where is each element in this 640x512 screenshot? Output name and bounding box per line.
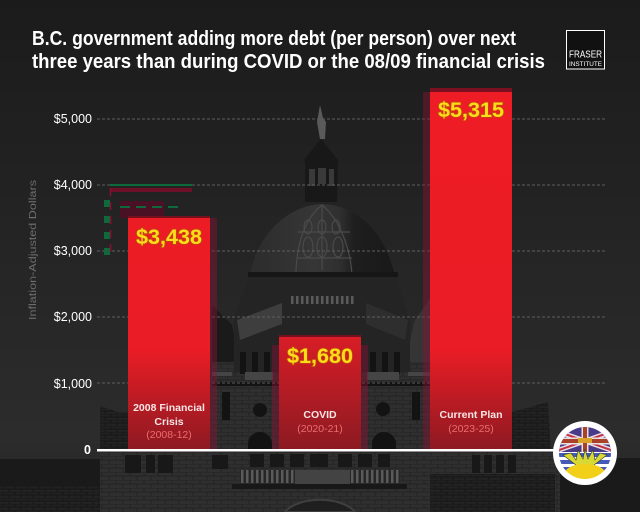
y axis labels: $1,000 bbox=[54, 377, 92, 391]
badge ring bbox=[553, 421, 617, 485]
bar top bbox=[430, 88, 512, 92]
y axis labels: 0 bbox=[84, 443, 91, 457]
years: (2020-21) bbox=[297, 423, 343, 435]
y axis labels: $3,000 bbox=[54, 244, 92, 258]
y axis labels: $2,000 bbox=[54, 310, 92, 324]
lower window row bbox=[125, 454, 516, 473]
dome panels bbox=[296, 205, 352, 275]
bar top bbox=[279, 335, 361, 338]
central facade bbox=[212, 362, 430, 452]
bar body bbox=[430, 92, 512, 450]
left base bbox=[0, 486, 100, 512]
logo text: FRASER bbox=[569, 50, 602, 60]
drum balcony right bbox=[366, 303, 408, 340]
icon: B.C. coat of arms badge bbox=[553, 421, 617, 485]
category label: 2008 Financial bbox=[133, 402, 205, 414]
baseline axis bbox=[97, 449, 567, 452]
value: $1,680 bbox=[287, 345, 353, 368]
union diagonals bbox=[559, 432, 611, 450]
left side turret bbox=[212, 305, 240, 400]
y axis title: Inflation-Adjusted Dollars bbox=[27, 180, 39, 320]
logo box bbox=[566, 30, 604, 69]
years: (2023-25) bbox=[448, 423, 494, 435]
background building: legislature bbox=[0, 105, 640, 512]
bar body bbox=[128, 218, 210, 450]
value: $5,315 bbox=[438, 99, 504, 122]
union diagonals red bbox=[559, 432, 611, 450]
lantern bbox=[304, 139, 338, 202]
flag blue field bbox=[559, 427, 611, 452]
wine block behind first bar bbox=[120, 201, 164, 218]
lantern windows bbox=[309, 168, 334, 186]
green and red dashed artifact bbox=[107, 185, 192, 255]
category label: Crisis bbox=[154, 416, 184, 428]
left end tower bbox=[100, 406, 128, 459]
union cross red bbox=[559, 427, 611, 452]
y axis labels bbox=[54, 112, 92, 457]
gridlines bbox=[97, 119, 606, 383]
right end tower bbox=[512, 402, 551, 456]
union cross bbox=[559, 427, 611, 452]
balustrade right bbox=[350, 470, 400, 483]
bar top shadow bbox=[128, 216, 210, 219]
sun rays bbox=[562, 448, 608, 465]
left dark roof bbox=[0, 459, 100, 486]
balustrade centre panel bbox=[295, 470, 350, 484]
drum balcony left bbox=[237, 303, 282, 340]
logo subtext: INSTITUTE bbox=[569, 61, 603, 68]
spire bbox=[317, 105, 326, 139]
facade light balconies bbox=[212, 372, 430, 380]
waves bbox=[560, 452, 610, 453]
y axis labels: $4,000 bbox=[54, 178, 92, 192]
dome bbox=[250, 204, 395, 277]
value: $3,438 bbox=[136, 226, 202, 249]
drum centre band bbox=[291, 296, 355, 304]
years: (2008-12) bbox=[146, 429, 192, 441]
balustrade left bbox=[240, 470, 295, 483]
facade dark details bbox=[212, 352, 430, 449]
drum of dome bbox=[234, 276, 410, 372]
title: B.C. government adding more debt (per person) over next bbox=[32, 28, 516, 50]
category label: Current Plan bbox=[439, 409, 503, 421]
lower stonework bbox=[100, 452, 560, 512]
right low ground bbox=[555, 458, 640, 512]
sun bbox=[566, 464, 604, 479]
title: three years than during COVID or the 08/09 financial crisis bbox=[32, 51, 545, 73]
y axis labels: $5,000 bbox=[54, 112, 92, 126]
category label: COVID bbox=[303, 409, 337, 421]
bar: COVID bbox=[279, 335, 361, 450]
lower entrance arch bbox=[285, 500, 355, 512]
right lower shadow bbox=[430, 474, 555, 512]
logo: Fraser Institute bbox=[566, 30, 604, 69]
right side turret bbox=[405, 298, 430, 400]
bar: 2008 Financial Crisis bbox=[128, 216, 210, 450]
bar tint bands bbox=[210, 92, 430, 450]
crown bbox=[578, 438, 592, 443]
bar body bbox=[279, 337, 361, 450]
dome base band bbox=[248, 272, 398, 277]
bar: Current Plan bbox=[430, 88, 512, 450]
ledge bbox=[232, 484, 407, 489]
